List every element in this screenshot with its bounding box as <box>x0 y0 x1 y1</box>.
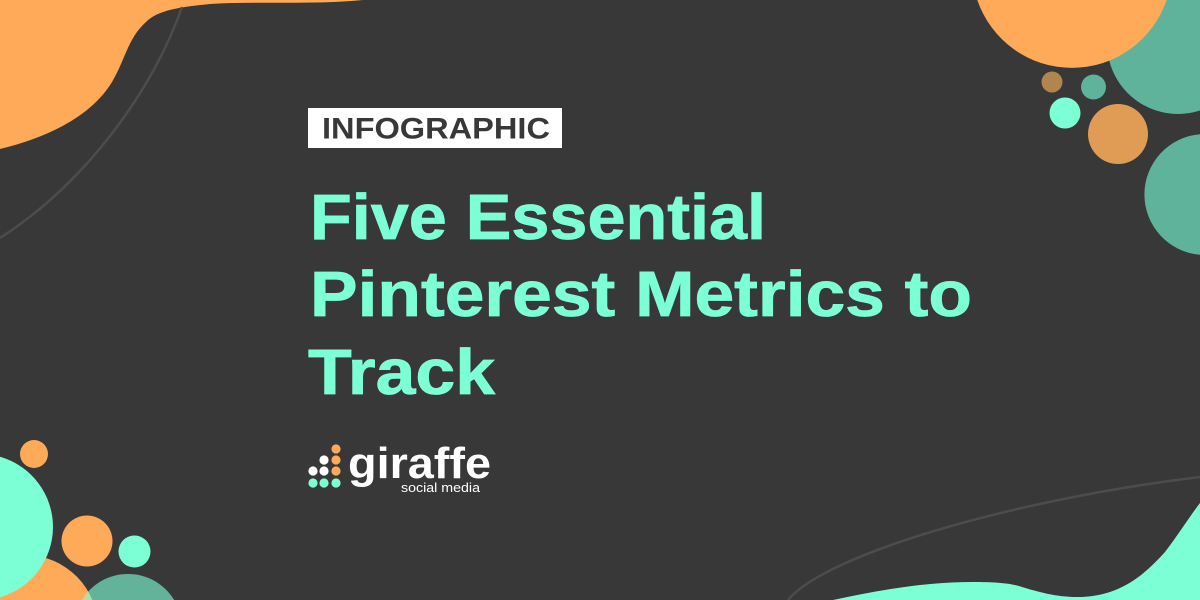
bottom-right mint blob <box>833 503 1200 600</box>
logo: giraffe social media <box>308 439 491 495</box>
top-left curved line <box>0 7 182 238</box>
bottom-left circle cluster <box>0 440 174 600</box>
logo: giraffe social media: social media <box>401 480 481 495</box>
icon: logo dots <box>308 444 341 488</box>
tag: infographic <box>308 108 562 148</box>
top-left orange blob <box>0 0 363 149</box>
bottom-right curved line <box>788 477 1200 600</box>
logo: giraffe social media: giraffe <box>348 439 491 488</box>
title: Pinterest Metrics to <box>310 258 972 330</box>
title: Five Essential <box>310 181 766 253</box>
title <box>308 181 972 408</box>
title: Track <box>308 336 495 408</box>
top-right circle cluster <box>977 0 1200 255</box>
tag: infographic: INFOGRAPHIC <box>322 112 550 146</box>
